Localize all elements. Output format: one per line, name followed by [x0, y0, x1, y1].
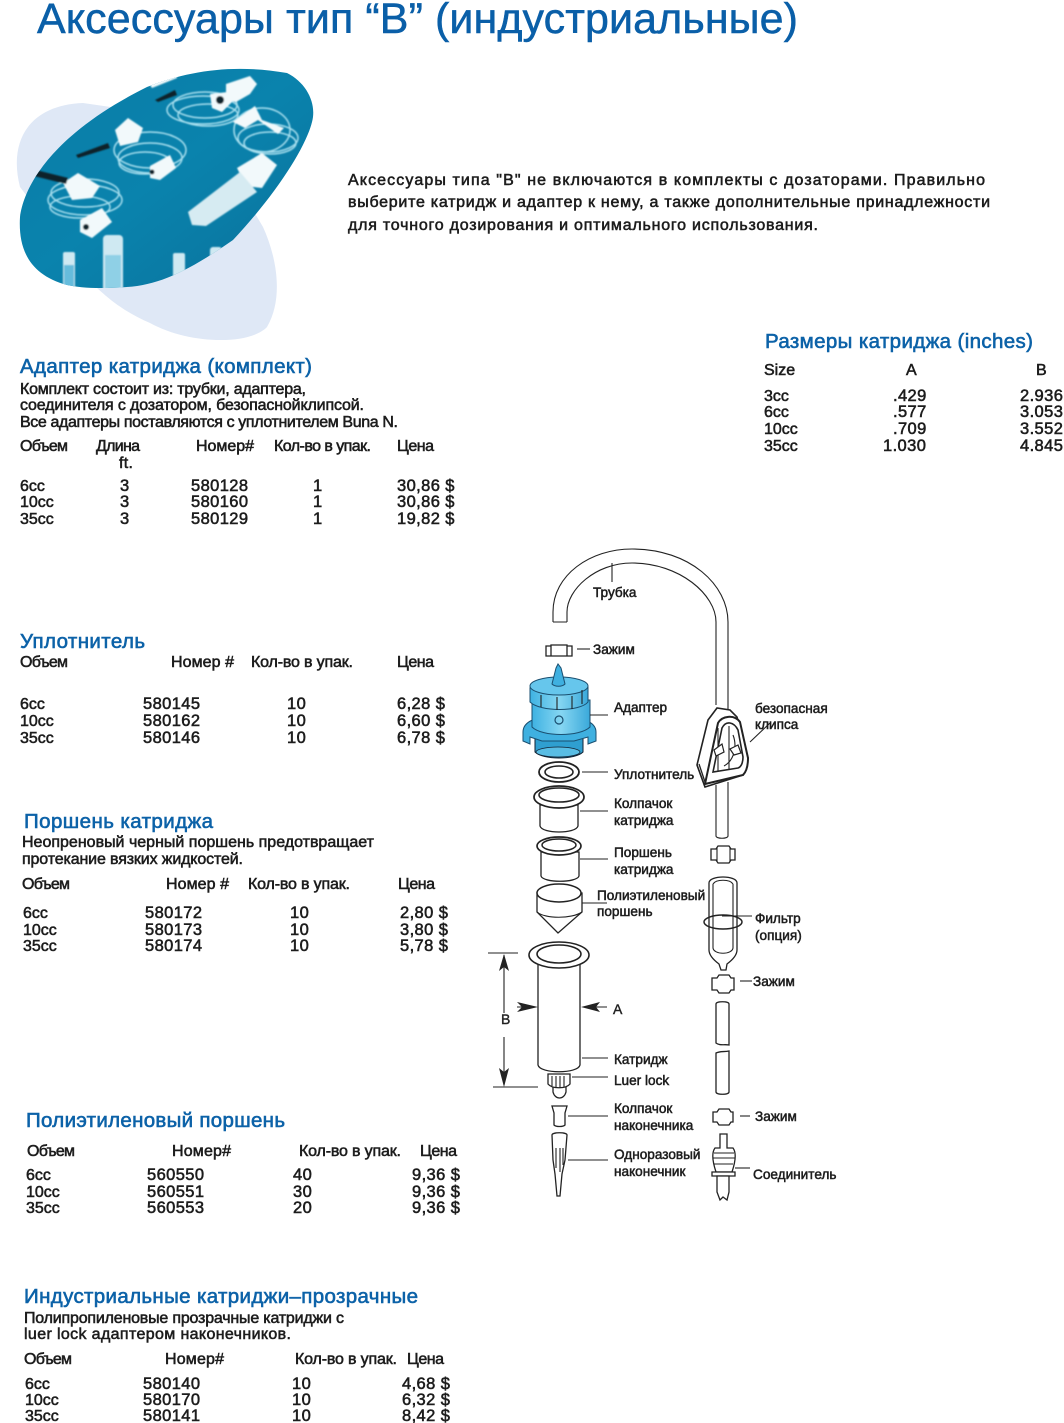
polyethylene piston	[537, 884, 607, 933]
intro text: выберите катридж и адаптер к нему, а также дополнительные принадлежности	[348, 194, 990, 211]
section: seal: 580145	[143, 695, 200, 713]
diagram labels: поршень	[597, 904, 653, 919]
section: adapter kit: 3	[120, 510, 130, 528]
section: industrial clear cartridges: 6cc	[25, 1376, 50, 1393]
section: adapter kit: Комплект состоит из: трубки, адаптера,	[20, 381, 306, 398]
section: cartridge dimensions: 10cc	[764, 421, 798, 438]
section: industrial clear cartridges: 4,68 $	[402, 1375, 450, 1393]
section: seal: 6,28 $	[397, 695, 445, 713]
section: polyethylene piston: Объем	[27, 1143, 75, 1160]
photo of accessories	[16, 68, 314, 340]
section: cartridge piston: 580172	[145, 904, 202, 922]
section: cartridge dimensions: 4.845	[1020, 437, 1063, 455]
dimension A: A	[613, 1001, 623, 1017]
intro text: для точного дозирования и оптимального использования.	[348, 217, 818, 234]
section: seal: 10	[287, 695, 306, 713]
heading: dimensions: Размеры катриджа (inches)	[765, 330, 1033, 353]
light background blob	[17, 103, 277, 340]
section: cartridge piston: 5,78 $	[400, 937, 448, 955]
section: industrial clear cartridges: Объем	[24, 1351, 72, 1368]
section: seal: 6cc	[20, 696, 45, 713]
diagram labels: клипса	[755, 717, 799, 732]
diagram labels: Поршень	[614, 845, 672, 860]
cartridge	[529, 942, 608, 1098]
clamp lower	[712, 975, 752, 993]
section: cartridge piston: протекание вязких жидкостей.	[22, 851, 243, 868]
section: polyethylene piston: 9,36 $	[412, 1166, 460, 1184]
section: seal: Цена	[397, 654, 434, 671]
section: polyethylene piston: 6cc	[26, 1167, 51, 1184]
diagram labels: (опция)	[755, 928, 802, 943]
diagram labels: наконечника	[614, 1118, 694, 1133]
section: seal	[20, 630, 445, 747]
section: adapter kit: Длина	[96, 438, 140, 455]
section: industrial clear cartridges: 6,32 $	[402, 1391, 450, 1409]
section: industrial clear cartridges: 580140	[143, 1375, 200, 1393]
section: cartridge dimensions: .709	[893, 420, 927, 438]
cartridge piston	[537, 837, 608, 881]
section: seal: 580162	[143, 712, 200, 730]
section: industrial clear cartridges: 10cc	[25, 1392, 59, 1409]
diagram labels: Колпачок	[614, 1101, 673, 1116]
diagram labels: Зажим	[593, 642, 635, 657]
section: cartridge piston: 2,80 $	[400, 904, 448, 922]
section: cartridge piston: Кол-во в упак.	[248, 876, 350, 893]
section: cartridge dimensions: .429	[893, 387, 927, 405]
diagram labels: Зажим	[755, 1109, 797, 1124]
section: industrial clear cartridges: Цена	[407, 1351, 444, 1368]
section: cartridge dimensions: 35cc	[764, 438, 798, 455]
heading: adapter kit: Адаптер катриджа (комплект)	[20, 355, 312, 378]
section: polyethylene piston: 9,36 $	[412, 1183, 460, 1201]
section: cartridge dimensions: 1.030	[883, 437, 926, 455]
section: cartridge piston: 10cc	[23, 922, 57, 939]
section: adapter kit: 3	[120, 493, 130, 511]
section: polyethylene piston: 560553	[147, 1199, 204, 1217]
section: seal: 10	[287, 712, 306, 730]
diagram labels: безопасная	[755, 701, 828, 716]
diagram labels: Уплотнитель	[614, 767, 694, 782]
section: cartridge piston: 35cc	[23, 938, 57, 955]
disposable tip	[552, 1133, 608, 1196]
section: cartridge dimensions: 3cc	[764, 388, 789, 405]
section: adapter kit: 35cc	[20, 511, 54, 528]
section: cartridge piston: 10	[290, 921, 309, 939]
section: industrial clear cartridges: luer lock адаптером наконечников.	[24, 1326, 291, 1343]
section: cartridge dimensions: B	[1036, 362, 1047, 379]
section: adapter kit: Номер#	[196, 438, 254, 455]
section: seal: 10cc	[20, 713, 54, 730]
intro text: Аксессуары типа "В" не включаются в комплекты с дозаторами. Правильно	[348, 172, 985, 189]
diagram labels: Соединитель	[753, 1167, 836, 1182]
section: adapter kit: 3	[120, 477, 130, 495]
section: seal: 35cc	[20, 730, 54, 747]
section: cartridge piston: Неопреновый черный поршень предотвращает	[22, 834, 375, 851]
section: polyethylene piston: 9,36 $	[412, 1199, 460, 1217]
dimension B: B	[501, 1011, 510, 1027]
adapter (blue)	[523, 664, 608, 758]
dimension A	[517, 1001, 623, 1017]
section: industrial clear cartridges: Номер#	[165, 1351, 224, 1368]
exploded parts diagram	[488, 549, 836, 1200]
section: cartridge dimensions: A	[906, 362, 917, 379]
section: seal: 580146	[143, 729, 200, 747]
section: cartridge piston	[22, 810, 448, 955]
section: cartridge dimensions	[764, 330, 1063, 455]
section: industrial clear cartridges: 10	[292, 1375, 311, 1393]
clamp middle	[711, 846, 735, 863]
section: industrial clear cartridges: Полипропиленовые прозрачные катриджи с	[24, 1310, 344, 1327]
section: polyethylene piston: Цена	[420, 1143, 457, 1160]
diagram labels: Катридж	[614, 1052, 668, 1067]
diagram labels: Luer lock	[614, 1073, 669, 1088]
section: seal: Объем	[20, 654, 68, 671]
filter	[704, 877, 752, 970]
diagram labels	[593, 585, 836, 1182]
section: adapter kit: соединителя с дозатором, безопаснойклипсой.	[20, 397, 364, 414]
section: adapter kit: 10cc	[20, 494, 54, 511]
section: adapter kit: 580129	[191, 510, 248, 528]
section: polyethylene piston	[26, 1109, 460, 1217]
section: adapter kit: 30,86 $	[397, 493, 455, 511]
section: adapter kit: Цена	[397, 438, 434, 455]
section: cartridge piston: Номер #	[166, 876, 229, 893]
section: industrial clear cartridges	[24, 1285, 450, 1423]
heading: polyethylene piston: Полиэтиленовый поршень	[26, 1109, 285, 1132]
diagram labels: катриджа	[614, 813, 674, 828]
section: industrial clear cartridges: 580170	[143, 1391, 200, 1409]
section: adapter kit: 6cc	[20, 478, 45, 495]
section: cartridge piston: 580174	[145, 937, 202, 955]
section: industrial clear cartridges: Кол-во в упак.	[295, 1351, 397, 1368]
section: seal: 10	[287, 729, 306, 747]
section: cartridge piston: 580173	[145, 921, 202, 939]
section: cartridge dimensions: 3.552	[1020, 420, 1063, 438]
section: polyethylene piston: 560551	[147, 1183, 204, 1201]
dimension B	[488, 953, 538, 1087]
section: cartridge piston: Цена	[398, 876, 435, 893]
section: adapter kit: Кол-во в упак.	[274, 438, 371, 455]
section: seal: Кол-во в упак.	[251, 654, 353, 671]
section: adapter kit: 580160	[191, 493, 248, 511]
section: cartridge piston: Объем	[22, 876, 70, 893]
diagram labels: Полиэтиленовый	[597, 888, 705, 903]
section: polyethylene piston: 560550	[147, 1166, 204, 1184]
diagram labels: Фильтр	[755, 911, 801, 926]
tube	[553, 549, 728, 838]
section: polyethylene piston: Кол-во в упак.	[299, 1143, 401, 1160]
diagram labels: катриджа	[614, 862, 674, 877]
section: polyethylene piston: 30	[293, 1183, 312, 1201]
section: cartridge dimensions: 2.936	[1020, 387, 1063, 405]
section: adapter kit: 1	[313, 510, 323, 528]
section: seal: 6,60 $	[397, 712, 445, 730]
section: adapter kit	[20, 355, 455, 528]
section: adapter kit: Объем	[20, 438, 68, 455]
section: adapter kit: 1	[313, 477, 323, 495]
diagram labels: наконечник	[614, 1164, 687, 1179]
tip cap	[552, 1106, 608, 1126]
diagram labels: Трубка	[593, 585, 637, 600]
section: adapter kit: Все адаптеры поставляются с уплотнителем Buna N.	[20, 414, 398, 431]
intro text	[348, 172, 990, 234]
diagram labels: Колпачок	[614, 796, 673, 811]
section: industrial clear cartridges: 10	[292, 1391, 311, 1409]
diagram labels: Одноразовый	[614, 1147, 700, 1162]
section: cartridge dimensions: Size	[764, 362, 795, 379]
cartridge cap	[534, 786, 608, 832]
seal ring	[539, 762, 608, 782]
section: cartridge piston: 3,80 $	[400, 921, 448, 939]
section: polyethylene piston: 20	[293, 1199, 312, 1217]
section: adapter kit: 1	[313, 493, 323, 511]
section: cartridge piston: 10	[290, 937, 309, 955]
section: cartridge piston: 6cc	[23, 905, 48, 922]
diagram labels: Зажим	[753, 974, 795, 989]
section: polyethylene piston: Номер#	[172, 1143, 231, 1160]
section: polyethylene piston: 35cc	[26, 1200, 60, 1217]
section: adapter kit: 19,82 $	[397, 510, 455, 528]
section: cartridge dimensions: .577	[893, 403, 927, 421]
section: cartridge dimensions: 3.053	[1020, 403, 1063, 421]
heading: clear cartridges: Индустриальные катриджи–прозрачные	[24, 1285, 418, 1308]
section: polyethylene piston: 40	[293, 1166, 312, 1184]
section: adapter kit: 30,86 $	[397, 477, 455, 495]
connector	[712, 1134, 750, 1200]
section: seal: 6,78 $	[397, 729, 445, 747]
heading: piston: Поршень катриджа	[24, 810, 214, 833]
section: polyethylene piston: 10cc	[26, 1184, 60, 1201]
safety clip	[697, 708, 770, 787]
heading: seal: Уплотнитель	[20, 630, 145, 653]
section: adapter kit: ft.	[119, 455, 133, 472]
section: adapter kit: 580128	[191, 477, 248, 495]
section: seal: Номер #	[171, 654, 234, 671]
clamp top	[546, 645, 590, 656]
diagram labels: Адаптер	[614, 700, 667, 715]
tube pieces	[716, 1002, 729, 1094]
clamp bottom	[713, 1109, 750, 1125]
section: cartridge dimensions: 6cc	[764, 404, 789, 421]
section: cartridge piston: 10	[290, 904, 309, 922]
teal photo ellipse	[20, 68, 314, 288]
